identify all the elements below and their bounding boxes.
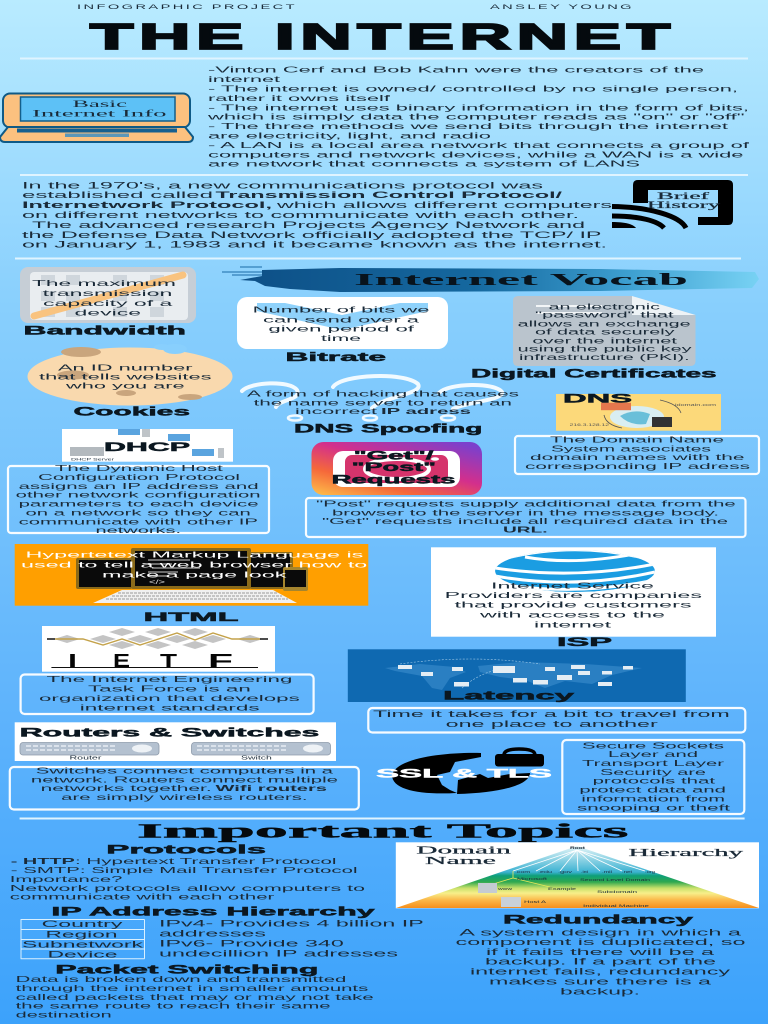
panel: ip address hierarchy [21, 907, 424, 959]
image: dns diagram: idomain.com [675, 402, 717, 407]
term: dns: System associates [551, 443, 711, 453]
term: isp: with access to the [477, 610, 666, 620]
chart: domain name hierarchy pyramid: Root [570, 845, 586, 850]
chart: domain name hierarchy pyramid: Individual Machine [583, 903, 651, 908]
term: dns spoofing [242, 376, 519, 436]
image: ietf logo: I [68, 651, 77, 671]
panel: redundancy: backup. [560, 986, 640, 996]
image: network computers: DHCP [104, 442, 191, 454]
term: html [15, 544, 368, 624]
image: devices on orange: </> [149, 580, 166, 586]
panel: basic internet info [0, 65, 751, 169]
term: bitrate: given period of [268, 324, 416, 334]
text block: basic facts: which is simply data the computer reads as "on" or "off" [205, 112, 745, 122]
panel: protocols: Importance? [10, 874, 123, 884]
panel: protocols [10, 844, 366, 902]
term: routers and switches: network. Routers connect multiple [31, 774, 339, 784]
term: get and post requests [306, 442, 746, 537]
panel: redundancy: makes sure there is a [489, 977, 711, 987]
term: ssl and tls: snooping or theft [577, 802, 732, 812]
chart: domain name hierarchy pyramid [396, 842, 759, 908]
panel: packet switching: Data is broken down and transmitted [16, 974, 347, 984]
term: bandwidth: capacity of a [43, 298, 173, 308]
text block: history [22, 180, 613, 250]
term: dhcp: other network configuration [16, 490, 261, 500]
term: get and post requests: "Get"/ [354, 450, 435, 462]
term: dhcp: Configuration Protocol [38, 472, 240, 482]
image: network computers [62, 429, 233, 462]
term: routers and switches: Switches connect computers in a [36, 765, 334, 775]
panel: protocols: Protocols [106, 844, 266, 856]
term: isp: Providers are companies [445, 590, 702, 600]
term: routers and switches: networks together. [41, 783, 212, 793]
term: dns: domain names with the [530, 452, 745, 462]
header: project and author [77, 5, 634, 11]
term: cookies: Cookies [74, 406, 190, 418]
term: dhcp: networks. [96, 525, 181, 535]
term: routers and switches: are simply wireless routers. [61, 792, 308, 802]
term: ssl and tls: Security are [600, 767, 707, 777]
panel: redundancy: component is duplicated, so [456, 937, 746, 947]
panel: protocols: - HTTP [11, 856, 76, 866]
text block: basic facts: - The three methods we send bits through the internet [208, 121, 730, 131]
term: latency: Time it takes for a bit to travel from [373, 709, 730, 719]
term: cookies: who you are [63, 381, 185, 391]
chart: domain name hierarchy pyramid: .com [515, 869, 531, 874]
icon: cookie [28, 344, 232, 406]
panel: redundancy: if it fails there will be a [486, 947, 714, 957]
icon: striped globe [495, 550, 655, 592]
term: html: Hypertetext Markup Language is [26, 550, 363, 560]
panel: redundancy: backup. If a part of the [485, 957, 716, 967]
panel: protocols: - SMTP: Simple Mail Transfer Protocol [11, 865, 358, 875]
panel: packet switching: called packets that may or may not take [16, 992, 374, 1002]
term: isp: Internet Service [491, 580, 655, 590]
term: ssl and tls: Layer and [608, 749, 699, 759]
term: dns spoofing: A form of hacking that causes [247, 389, 519, 399]
text block: basic facts: computers and network devices, while a WAN is a wide [208, 149, 744, 159]
icon: camera logo [312, 442, 482, 495]
term: get and post requests: "Post" requests supply additional data from the [316, 499, 736, 509]
panel: packet switching: through the internet in smaller amounts [16, 983, 368, 993]
chart: domain name hierarchy pyramid: Second Level Domain [580, 877, 650, 882]
text block: ipv4 and ipv6 [159, 919, 424, 959]
panel: redundancy: internet fails, redundancy [470, 967, 731, 977]
table: hierarchy levels: Device [48, 949, 118, 959]
term: digital certificates: over the internet [532, 336, 679, 345]
term: digital certificates: an electronic [549, 302, 660, 311]
term: dns spoofing: DNS Spoofing [294, 424, 482, 436]
chart: domain name hierarchy pyramid: www [498, 886, 512, 891]
text block: history: which allows different computers [274, 200, 613, 210]
panel: protocols: : Hypertext Transfer Protocol [75, 856, 337, 866]
term: ssl and tls: Transport Layer [582, 758, 724, 768]
term: html: HTML [144, 612, 238, 624]
term: digital certificates: of data securely [535, 328, 674, 337]
icon: envelope chevron [257, 303, 428, 330]
term: get and post requests: "Get" requests include all required data in the [322, 516, 729, 526]
panel: ip address hierarchy: IP Address Hierarchy [51, 907, 376, 919]
text block: history: the Defense Data Network officially adopted the TCP/ IP [22, 230, 602, 240]
chart: domain name hierarchy pyramid: Example [548, 886, 577, 891]
term: dns spoofing: incorrect [295, 406, 379, 416]
icon: question marks [242, 376, 502, 420]
icon: cast screen: History [647, 200, 721, 210]
panel: redundancy: A system design in which a [459, 927, 741, 937]
term: dns: corresponding IP adress [525, 461, 750, 471]
image: dns diagram: 216.3.128.12 [570, 422, 610, 427]
term: ssl and tls [376, 740, 744, 814]
term: bitrate [237, 297, 448, 364]
term: routers and switches: Wifi routers [216, 783, 328, 793]
text block: history: Transmission Control Protocol/ [216, 190, 563, 200]
image: dns diagram [556, 394, 721, 431]
term: cookies: An ID number [58, 362, 193, 372]
text block: history: The advanced research Projects Agency Network and [32, 220, 585, 230]
term: bitrate: can send over a [263, 314, 420, 324]
image: ietf logo: F [208, 651, 233, 671]
chart: domain name hierarchy pyramid: Host A [524, 899, 547, 904]
header: project and author: ANSLEY YOUNG [490, 5, 634, 11]
panel: packet switching: destination [16, 1009, 112, 1019]
text block: basic facts: are electricity, light, and radio [208, 130, 492, 140]
term: dhcp: The Dynamic Host [55, 463, 224, 473]
term: dhcp: assigns an IP address and [19, 481, 259, 491]
term: ietf: Task Force is an [88, 684, 251, 694]
text block: history: on January 1, 1983 and it became known as the internet. [22, 240, 607, 250]
chart: domain name hierarchy pyramid: .int [581, 869, 589, 874]
term: ietf: The Internet Engineering [46, 674, 293, 684]
icon: laptop [0, 94, 193, 142]
term: bandwidth: transmission [43, 288, 173, 298]
icon: keyboard [20, 267, 196, 323]
term: ssl and tls: protocols that [593, 776, 717, 786]
term: isp: ISP [557, 637, 613, 649]
term: bandwidth: device [74, 308, 142, 318]
term: cookies [28, 344, 232, 418]
term: dns: The Domain Name [550, 434, 725, 444]
icon: document [513, 296, 696, 366]
term: digital certificates: "password" that [535, 311, 675, 320]
term: get and post requests: Requests [332, 474, 456, 486]
panel: protocols: communicate with each other [10, 892, 275, 902]
term: digital certificates: infrastructure (PKI). [519, 353, 690, 362]
term: isp: internet [534, 619, 613, 629]
image: router and switch: Switch [241, 756, 272, 762]
table: hierarchy levels [21, 919, 145, 959]
term: digital certificates: using the public key [518, 345, 692, 354]
text block: basic facts: internet [208, 74, 282, 84]
term: isp: that provide customers [454, 600, 692, 610]
term: digital certificates [471, 296, 717, 380]
term: html: used to tell a web browser how to [21, 559, 368, 569]
icon: cast screen [612, 180, 733, 228]
heading: internet vocab [222, 267, 759, 292]
term: get and post requests: browser to the server in the message body. [332, 508, 719, 518]
chart: domain name hierarchy pyramid: .edu [538, 869, 552, 874]
text block: basic facts: are network that connects a system of LANS [208, 159, 641, 169]
text block: history: Internetwork Protocol, [22, 200, 272, 210]
icon: globe with lock [392, 749, 544, 794]
term: dhcp: communicate with other IP [19, 516, 259, 526]
text block: ipv4 and ipv6: IPv4- Provides 4 billion IP [159, 919, 424, 929]
term: dhcp: on a network so they can [26, 508, 251, 518]
panel: brief history [22, 180, 733, 250]
term: routers and switches [10, 722, 359, 810]
text block: history: established called [22, 190, 213, 200]
term: ssl and tls: SSL & TLS [376, 769, 553, 781]
term: dns spoofing: IP adress [381, 406, 472, 416]
term: dns spoofing: the name server to return an [254, 397, 513, 407]
term: latency [348, 649, 745, 732]
text block: basic facts [205, 65, 751, 169]
chart: domain name hierarchy pyramid: .org [645, 869, 655, 874]
icon: cast screen: Brief [657, 191, 709, 201]
table: hierarchy levels: Subnetwork [22, 939, 144, 949]
chart: domain name hierarchy pyramid: .net [622, 869, 633, 874]
term: dhcp [8, 429, 269, 535]
image: ietf logo: E [113, 651, 130, 671]
term: digital certificates: Digital Certificates [471, 368, 717, 380]
image: router and switch: Routers & Switches [20, 728, 319, 740]
panel: protocols: Network protocols allow computers to [10, 883, 366, 893]
text block: basic facts: - The internet is owned/ controlled by no single person, [208, 84, 738, 94]
term: digital certificates: allows an exchange [518, 319, 692, 328]
panel: packet switching: Packet Switching [55, 964, 318, 976]
text block: basic facts: - A LAN is a local area network that connects a group of [208, 140, 751, 150]
text block: basic facts: rather it owns itself [208, 93, 392, 103]
term: get and post requests: "Post" [352, 462, 436, 474]
text block: basic facts: -Vinton Cerf and Bob Kahn were the creators of the [208, 65, 705, 75]
chart: domain name hierarchy pyramid: Domain [416, 845, 511, 856]
icon: laptop: Basic [72, 99, 127, 109]
chart: domain name hierarchy pyramid: Subdomain [597, 889, 637, 894]
term: html: make a page look [102, 569, 289, 579]
text block: ipv4 and ipv6: addresses [159, 929, 267, 939]
panel: redundancy: Redundancy [503, 914, 695, 926]
text block: history: In the 1970's, a new communications protocol was [22, 180, 544, 190]
header: project and author: INFOGRAPHIC PROJECT [77, 5, 297, 11]
term: ietf: internet standards [80, 702, 260, 712]
chart: domain name hierarchy pyramid: .mil [602, 869, 612, 874]
text block: ipv4 and ipv6: IPv6- Provide 340 [159, 939, 344, 949]
term: bitrate: time [321, 333, 362, 343]
term: bandwidth: Bandwidth [24, 326, 186, 338]
table: hierarchy levels: Country [42, 919, 124, 929]
term: ietf: organization that develops [39, 693, 300, 703]
term: dns [515, 394, 759, 474]
heading: important topics: Important Topics [137, 820, 629, 842]
panel: packet switching [16, 964, 374, 1019]
chart: domain name hierarchy pyramid: Hierarchy [628, 848, 743, 859]
term: bandwidth: The maximum [32, 278, 176, 288]
text block: basic facts: - The internet uses binary information in the form of bits, [208, 102, 749, 112]
table: hierarchy levels: Region [46, 929, 118, 939]
term: latency: one place to another [446, 719, 658, 729]
image: ietf logo: T [160, 651, 177, 671]
term: get and post requests: URL. [503, 524, 548, 534]
image: devices on orange [15, 544, 368, 606]
term: latency: Latency [443, 688, 575, 702]
title: THE INTERNET [90, 16, 676, 57]
icon: laptop: Internet Info [32, 109, 168, 119]
term: bitrate: Bitrate [286, 352, 386, 364]
panel: packet switching: the same route to reach their same [16, 1000, 331, 1010]
text block: ipv4 and ipv6: undecillion IP adresses [159, 949, 399, 959]
term: bitrate: Number of bits we [253, 305, 430, 315]
brush stroke [222, 267, 759, 292]
term: ssl and tls: Secure Sockets [582, 740, 724, 750]
panel: redundancy [456, 914, 746, 996]
heading: internet vocab: Internet Vocab [354, 270, 688, 289]
term: cookies: that tells websites [39, 371, 212, 381]
chart: domain name hierarchy pyramid: .gov [558, 869, 572, 874]
term: ssl and tls: protect data and [579, 785, 727, 795]
term: ietf [21, 626, 314, 714]
term: bandwidth [20, 267, 196, 338]
term: isp [431, 547, 716, 649]
image: network computers: DHCP Server [71, 456, 115, 462]
image: router and switch: Router [70, 756, 102, 762]
image: router and switch [15, 722, 336, 762]
image: world map [348, 649, 686, 702]
chart: domain name hierarchy pyramid: Microsoft [517, 876, 549, 881]
chart: domain name hierarchy pyramid: Name [425, 856, 498, 867]
image: ietf logo [42, 626, 275, 672]
image: dns diagram: DNS [563, 394, 633, 406]
term: ssl and tls: information from [581, 794, 725, 804]
text block: history: on different networks to communicate with each other. [22, 210, 579, 220]
term: dhcp: parameters to each device [19, 499, 259, 509]
